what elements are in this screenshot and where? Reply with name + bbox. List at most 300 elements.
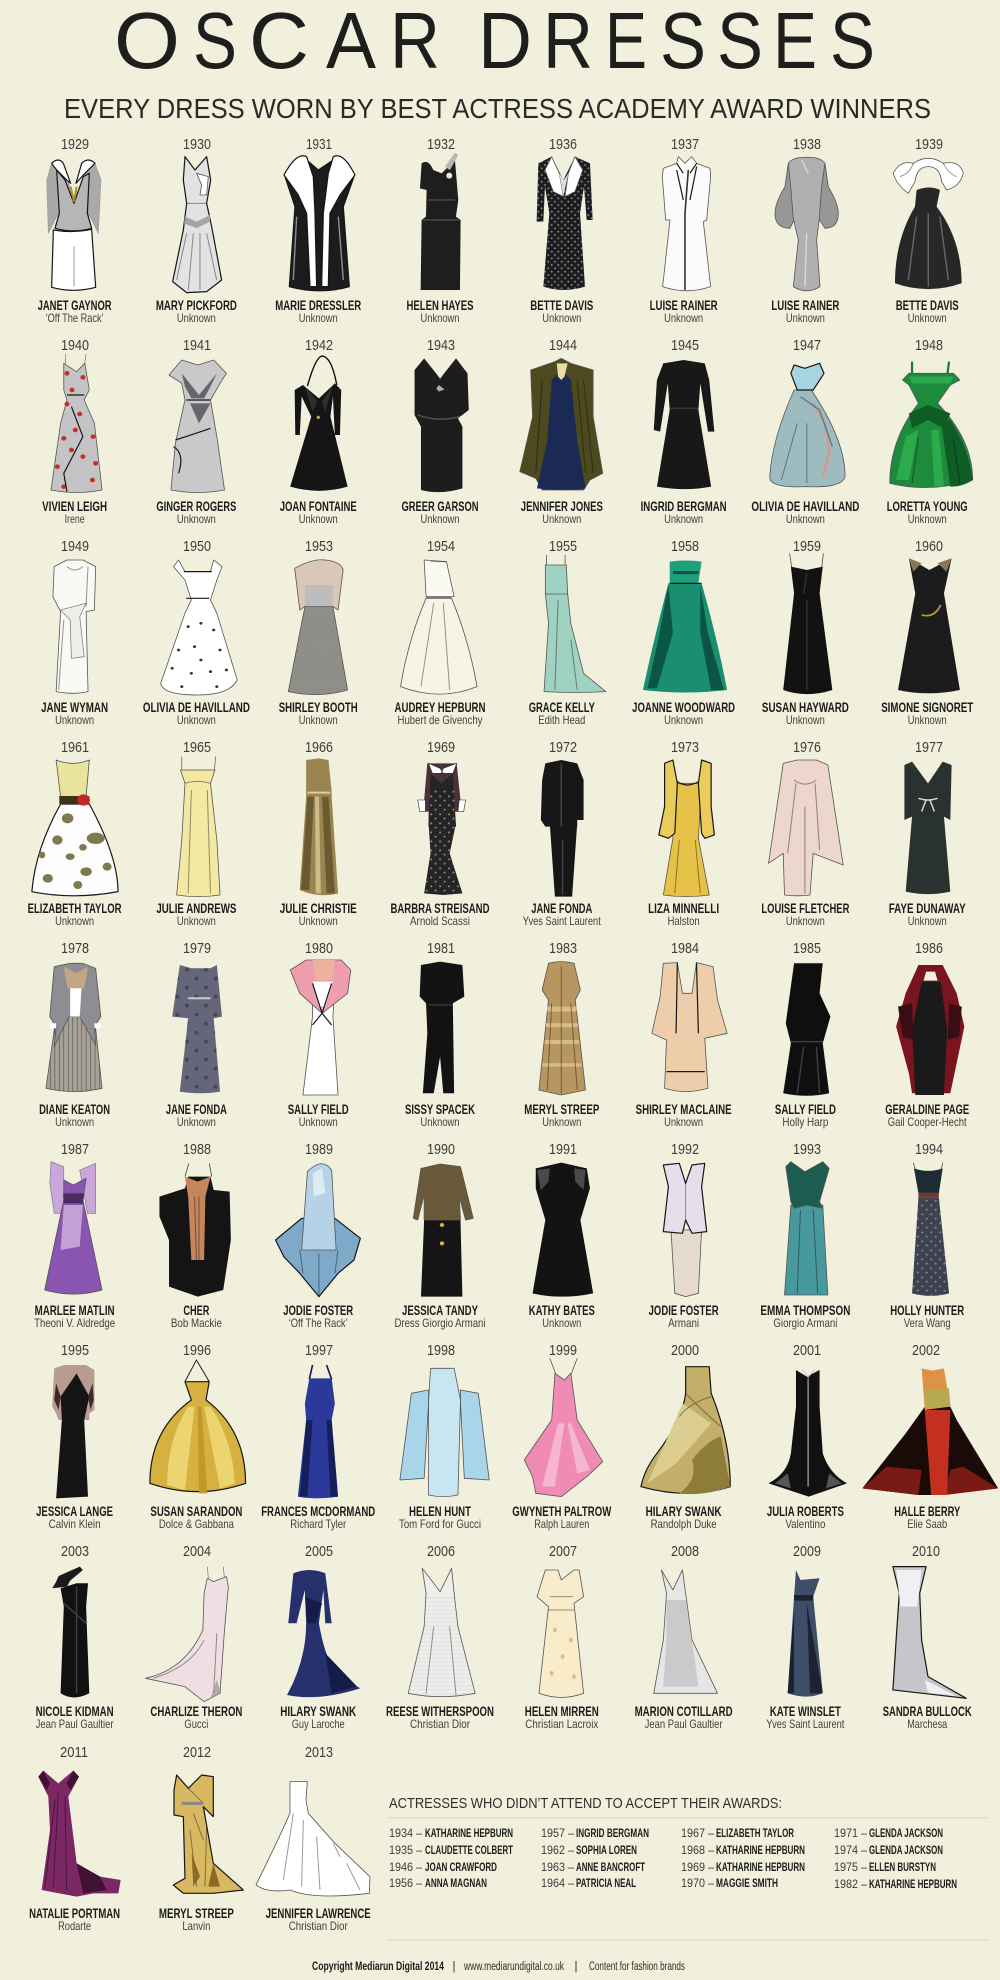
year: 1950 <box>183 538 211 555</box>
caption <box>143 700 250 727</box>
caption: JESSICA TANDY <box>402 1303 478 1318</box>
caption <box>524 1102 599 1129</box>
caption: Unknown <box>299 914 338 928</box>
year: 2001 <box>793 1342 821 1359</box>
list column 2: SOPHIA LOREN <box>576 1843 637 1857</box>
dress <box>256 1782 370 1896</box>
year: 1961 <box>61 739 89 756</box>
cell: 1989 Jodie Foster <box>276 1141 360 1330</box>
footer: | <box>574 1961 578 1973</box>
dress <box>420 962 464 1093</box>
caption <box>28 901 122 928</box>
dress <box>298 1365 338 1498</box>
dress <box>400 1368 489 1497</box>
caption: LUISE RAINER <box>771 298 840 313</box>
caption: HELEN HUNT <box>409 1504 472 1519</box>
year: 1976 <box>793 739 821 756</box>
list column 4: 1975 – <box>834 1860 867 1874</box>
caption <box>523 901 601 928</box>
caption: Vera Wang <box>904 1316 951 1330</box>
list column 1: 1935 – <box>389 1843 422 1857</box>
year: 2004 <box>183 1543 211 1560</box>
year: 2000 <box>671 1342 699 1359</box>
caption: Bob Mackie <box>171 1316 222 1330</box>
dress <box>415 358 469 492</box>
caption: Dolce & Gabbana <box>159 1517 234 1531</box>
dress <box>539 962 586 1095</box>
cell: 2006 Reese Witherspoon <box>386 1543 494 1731</box>
cell: 1993 Emma Thompson <box>760 1141 850 1330</box>
caption <box>530 298 593 325</box>
year: 1999 <box>549 1342 577 1359</box>
dress <box>784 1162 829 1295</box>
year: 2011 <box>60 1744 88 1761</box>
caption: KATE WINSLET <box>770 1704 841 1719</box>
caption <box>279 700 358 727</box>
cell: 1969 Barbra Streisand <box>390 739 490 928</box>
list column 2: 1963 – <box>541 1860 574 1874</box>
dress <box>284 156 355 291</box>
year: 1945 <box>671 337 699 354</box>
caption: OLIVIA DE HAVILLAND <box>751 499 860 514</box>
dress <box>300 758 338 895</box>
caption: Unknown <box>299 1115 338 1129</box>
year: 1994 <box>915 1141 943 1158</box>
dress <box>401 560 477 694</box>
caption: Unknown <box>786 914 825 928</box>
caption: Unknown <box>786 311 825 325</box>
caption: Halston <box>668 914 700 928</box>
caption: NICOLE KIDMAN <box>36 1704 114 1719</box>
year: 2012 <box>183 1744 211 1761</box>
caption <box>406 298 474 325</box>
caption <box>39 1102 110 1129</box>
list column 1: ANNA MAGNAN <box>425 1876 487 1890</box>
caption <box>894 1504 960 1531</box>
caption: HILARY SWANK <box>646 1504 722 1519</box>
year: 1959 <box>793 538 821 555</box>
caption: Irene <box>65 512 85 526</box>
caption <box>648 901 719 928</box>
cell: 1991 Kathy Bates <box>529 1141 595 1330</box>
footer: Copyright Mediarun Digital 2014 <box>312 1961 444 1973</box>
cell: 2008 Marion Cotillard <box>635 1543 733 1731</box>
year: 1992 <box>671 1141 699 1158</box>
caption: CHARLIZE THERON <box>150 1704 242 1719</box>
caption <box>889 901 966 928</box>
caption: Unknown <box>664 512 703 526</box>
year: 1941 <box>183 337 211 354</box>
year: 1986 <box>915 940 943 957</box>
cell: 1983 Meryl Streep <box>524 940 599 1129</box>
caption: JODIE FOSTER <box>283 1303 353 1318</box>
cell: 2001 Julia Roberts <box>767 1342 847 1531</box>
year: 1955 <box>549 538 577 555</box>
dress <box>537 157 593 290</box>
caption <box>386 1704 494 1731</box>
caption <box>41 700 108 727</box>
caption: Unknown <box>55 1115 94 1129</box>
dress <box>659 760 714 897</box>
caption <box>775 1102 836 1129</box>
year: 1938 <box>793 136 821 153</box>
list column 3: 1967 – <box>681 1826 714 1840</box>
cell: 1965 Julie Andrews <box>156 739 236 928</box>
list column 1: 1956 – <box>389 1876 422 1890</box>
year: 1969 <box>427 739 455 756</box>
caption <box>512 1504 611 1531</box>
caption <box>641 499 727 526</box>
caption <box>394 1303 486 1330</box>
caption: Unknown <box>664 1115 703 1129</box>
caption: SISSY SPACEK <box>405 1102 475 1117</box>
caption: GREER GARSON <box>402 499 478 514</box>
caption: INGRID BERGMAN <box>641 499 727 514</box>
cell: 1994 Holly Hunter <box>890 1141 964 1330</box>
caption: Yves Saint Laurent <box>523 914 601 928</box>
dress <box>783 963 830 1096</box>
dress <box>912 1163 949 1296</box>
caption: REESE WITHERSPOON <box>386 1704 494 1719</box>
caption: Elie Saab <box>907 1517 947 1531</box>
caption: Guy Laroche <box>292 1717 345 1731</box>
dress <box>641 1367 730 1494</box>
list column 2: 1957 – <box>541 1826 574 1840</box>
dress <box>38 1771 121 1897</box>
year: 2007 <box>549 1543 577 1560</box>
cell: 2000 Hilary Swank <box>641 1342 730 1531</box>
year: 2009 <box>793 1543 821 1560</box>
dress <box>52 1365 94 1498</box>
cell: 1996 Susan Sarandon <box>150 1342 246 1531</box>
year: 1979 <box>183 940 211 957</box>
cell: 1988 Cher <box>159 1141 231 1330</box>
cell: 1949 Jane Wyman <box>41 538 108 727</box>
caption <box>283 1303 353 1330</box>
caption: JANE FONDA <box>166 1102 227 1117</box>
caption <box>275 298 361 325</box>
dress <box>862 1368 998 1495</box>
caption: JENNIFER LAWRENCE <box>266 1906 371 1921</box>
year: 1949 <box>61 538 89 555</box>
caption <box>896 298 959 325</box>
list column 1: JOAN CRAWFORD <box>425 1860 497 1874</box>
footer: | <box>452 1961 456 1973</box>
caption: Gail Cooper-Hecht <box>888 1115 967 1129</box>
list column 3: ELIZABETH TAYLOR <box>716 1826 794 1840</box>
cell: 1932 Helen Hayes <box>406 136 474 325</box>
dress <box>51 354 102 492</box>
cell: 2007 Helen Mirren <box>525 1543 599 1731</box>
cell: 1948 Loretta Young <box>887 337 973 526</box>
year: 1954 <box>427 538 455 555</box>
caption <box>883 1704 972 1731</box>
dress <box>544 555 606 692</box>
dress <box>52 1567 89 1697</box>
cell: 1955 Grace Kelly <box>529 538 606 727</box>
caption: JOAN FONTAINE <box>280 499 357 514</box>
dress <box>893 158 963 289</box>
year: 1960 <box>915 538 943 555</box>
caption <box>761 901 850 928</box>
caption: JULIE ANDREWS <box>156 901 236 916</box>
dress <box>150 1360 246 1493</box>
caption: Unknown <box>664 713 703 727</box>
caption: Christian Dior <box>410 1717 470 1731</box>
caption <box>280 901 357 928</box>
dress <box>898 558 960 693</box>
caption <box>525 1704 599 1731</box>
dress <box>169 360 226 492</box>
cell: 1999 Gwyneth Paltrow <box>512 1342 611 1531</box>
caption: HILARY SWANK <box>280 1704 356 1719</box>
cell: 1931 Marie Dressler <box>275 136 361 325</box>
caption: Unknown <box>299 311 338 325</box>
caption <box>390 901 490 928</box>
year: 1984 <box>671 940 699 957</box>
caption: MARLEE MATLIN <box>35 1303 115 1318</box>
caption <box>887 499 968 526</box>
cell: 1937 Luise Rainer <box>650 136 718 325</box>
caption <box>42 499 107 526</box>
dress <box>662 157 711 291</box>
year: 1937 <box>671 136 699 153</box>
cell: 1977 Faye Dunaway <box>889 739 966 928</box>
list column 4: GLENDA JACKSON <box>869 1843 943 1857</box>
caption <box>632 700 735 727</box>
caption: SHIRLEY BOOTH <box>279 700 358 715</box>
year: 1998 <box>427 1342 455 1359</box>
list column 1 <box>389 1826 513 1890</box>
dress <box>418 763 466 895</box>
caption <box>288 1102 349 1129</box>
cell: 2012 Meryl Streep <box>159 1744 243 1933</box>
dress <box>775 157 838 291</box>
year: 1973 <box>671 739 699 756</box>
year: 1981 <box>427 940 455 957</box>
list column 4 <box>834 1826 957 1891</box>
caption: JULIE CHRISTIE <box>280 901 357 916</box>
year: 2003 <box>61 1543 89 1560</box>
caption: JULIA ROBERTS <box>767 1504 844 1519</box>
year: 1936 <box>549 136 577 153</box>
caption: Unknown <box>908 713 947 727</box>
caption: Unknown <box>420 311 460 325</box>
year: 1972 <box>549 739 577 756</box>
caption: Christian Dior <box>289 1919 348 1933</box>
caption: Valentino <box>785 1517 826 1531</box>
caption: Edith Head <box>538 713 585 727</box>
panel heading: ACTRESSES WHO DIDN’T ATTEND TO ACCEPT THEIR AWARDS: <box>389 1795 782 1812</box>
cell: 1938 Luise Rainer <box>771 136 840 325</box>
list column 2: 1964 – <box>541 1876 574 1890</box>
dress <box>520 358 603 490</box>
dress <box>413 1164 473 1297</box>
year: 1997 <box>305 1342 333 1359</box>
caption: LUISE RAINER <box>650 298 718 313</box>
cell: 1943 Greer Garson <box>402 337 478 526</box>
caption: Unknown <box>542 1316 581 1330</box>
cell: 1984 Shirley MacLaine <box>636 940 732 1129</box>
caption: JANE WYMAN <box>41 700 108 715</box>
cell: 2002 Halle Berry <box>862 1342 998 1531</box>
cell: 1972 Jane Fonda <box>523 739 601 928</box>
year: 1989 <box>305 1141 333 1158</box>
dress <box>53 560 96 693</box>
caption: Unknown <box>786 512 825 526</box>
caption: BETTE DAVIS <box>530 298 593 313</box>
dress <box>904 762 952 894</box>
caption: Unknown <box>542 1115 581 1129</box>
caption: Lanvin <box>182 1919 210 1933</box>
dress <box>173 157 222 293</box>
cell: 1954 Audrey Hepburn <box>394 538 486 727</box>
year: 1993 <box>793 1141 821 1158</box>
caption: Unknown <box>299 713 338 727</box>
dress <box>537 1570 584 1697</box>
list column 2: 1962 – <box>541 1843 574 1857</box>
caption: Yves Saint Laurent <box>766 1717 845 1731</box>
cell: 1973 Liza Minnelli <box>648 739 719 928</box>
cell: 1958 Joanne Woodward <box>632 538 735 727</box>
caption <box>767 1504 844 1531</box>
caption: Unknown <box>55 914 94 928</box>
caption <box>751 499 860 526</box>
caption: HALLE BERRY <box>894 1504 960 1519</box>
caption: HELEN HAYES <box>406 298 474 313</box>
year: 1965 <box>183 739 211 756</box>
year: 2002 <box>912 1342 940 1359</box>
caption: JESSICA LANGE <box>36 1504 113 1519</box>
caption <box>771 298 840 325</box>
cell: 1960 Simone Signoret <box>881 538 974 727</box>
cell: 1929 Janet Gaynor <box>38 136 112 325</box>
dress <box>643 560 727 692</box>
list column 4: 1982 – <box>834 1877 867 1891</box>
cell: 1986 Geraldine Page <box>885 940 969 1129</box>
dress <box>290 356 348 491</box>
year: 2005 <box>305 1543 333 1560</box>
caption: Unknown <box>908 311 947 325</box>
caption: Jean Paul Gaultier <box>645 1717 723 1731</box>
caption: Hubert de Givenchy <box>398 713 482 727</box>
year: 2006 <box>427 1543 455 1560</box>
caption: Theoni V. Aldredge <box>34 1316 115 1330</box>
footer <box>312 1961 685 1973</box>
caption: SUSAN HAYWARD <box>762 700 849 715</box>
cell: 2005 Hilary Swank <box>280 1543 360 1731</box>
caption: SHIRLEY MACLAINE <box>636 1102 732 1117</box>
cell: 1979 Jane Fonda <box>166 940 227 1129</box>
caption: Unknown <box>177 713 216 727</box>
dress <box>652 963 727 1092</box>
caption: Gucci <box>184 1717 208 1731</box>
dress <box>288 560 348 695</box>
cell: 2011 Natalie Portman <box>29 1744 121 1933</box>
caption: SALLY FIELD <box>288 1102 349 1117</box>
dress <box>541 760 584 897</box>
dress <box>890 362 973 488</box>
caption <box>890 1303 964 1330</box>
year: 1947 <box>793 337 821 354</box>
caption: Rodarte <box>58 1919 91 1933</box>
caption <box>405 1102 475 1129</box>
list column 1: CLAUDETTE COLBERT <box>425 1843 513 1857</box>
cell: 1995 Jessica Lange <box>36 1342 113 1531</box>
cell: 1987 Marlee Matlin <box>34 1141 115 1330</box>
caption <box>649 1303 719 1330</box>
dress <box>161 560 237 695</box>
caption: JANE FONDA <box>531 901 592 916</box>
list column 4: ELLEN BURSTYN <box>869 1860 936 1874</box>
caption: Jean Paul Gaultier <box>36 1717 114 1731</box>
caption <box>521 499 603 526</box>
dress <box>287 1570 360 1697</box>
caption <box>261 1504 375 1531</box>
caption: Unknown <box>177 311 216 325</box>
dress <box>654 360 714 489</box>
caption <box>150 1704 242 1731</box>
dress <box>893 1567 966 1698</box>
dress <box>290 960 351 1095</box>
dress <box>173 1775 243 1893</box>
dress <box>159 1163 231 1297</box>
dress <box>47 160 101 290</box>
caption: LOUISE FLETCHER <box>761 901 850 916</box>
caption <box>266 1906 371 1933</box>
list column 2: INGRID BERGMAN <box>576 1826 649 1840</box>
dress <box>896 965 964 1095</box>
caption <box>650 298 718 325</box>
caption: FRANCES MCDORMAND <box>261 1504 375 1519</box>
cell: 1961 Elizabeth Taylor <box>28 739 122 928</box>
caption <box>394 700 486 727</box>
cell: 1981 Sissy Spacek <box>405 940 475 1129</box>
cell: 1940 Vivien Leigh <box>42 337 107 526</box>
year: 1995 <box>61 1342 89 1359</box>
dress <box>783 553 832 694</box>
list column 3: KATHARINE HEPBURN <box>716 1843 805 1857</box>
cell: 2003 Nicole Kidman <box>36 1543 114 1731</box>
caption <box>29 1906 120 1933</box>
caption: EMMA THOMPSON <box>760 1303 850 1318</box>
year: 1985 <box>793 940 821 957</box>
caption: Tom Ford for Gucci <box>399 1517 481 1531</box>
list column 3: 1970 – <box>681 1876 714 1890</box>
dress <box>276 1164 360 1297</box>
year: 1991 <box>549 1141 577 1158</box>
dress <box>45 1162 102 1294</box>
caption: Marchesa <box>907 1717 947 1731</box>
cell: 2010 Sandra Bullock <box>883 1543 972 1731</box>
year: 1987 <box>61 1141 89 1158</box>
list column 4: 1971 – <box>834 1826 867 1840</box>
list column 3: KATHARINE HEPBURN <box>716 1860 805 1874</box>
caption: Unknown <box>420 1115 460 1129</box>
list column 4: KATHARINE HEPBURN <box>869 1877 957 1891</box>
caption: CHER <box>183 1303 210 1318</box>
cell: 1976 Louise Fletcher <box>761 739 850 928</box>
cell: 1985 Sally Field <box>775 940 836 1129</box>
caption: ‘Off The Rack’ <box>46 311 104 325</box>
caption: Unknown <box>786 713 825 727</box>
caption <box>38 298 112 325</box>
list column 2: PATRICIA NEAL <box>576 1876 636 1890</box>
caption <box>402 499 478 526</box>
caption: MERYL STREEP <box>524 1102 599 1117</box>
dress <box>769 760 843 896</box>
year: 1980 <box>305 940 333 957</box>
